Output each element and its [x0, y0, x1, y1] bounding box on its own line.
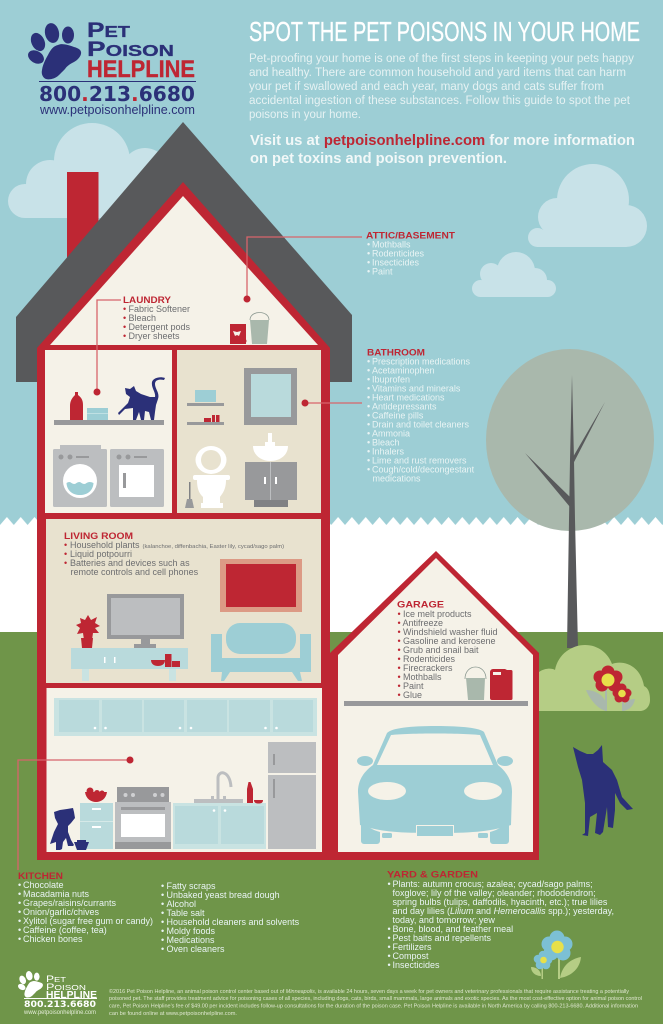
- plant: [76, 615, 100, 648]
- text: garage: •: [398, 681, 401, 691]
- text: bathroom: medications: [372, 474, 421, 484]
- callout line: attic: [244, 237, 362, 302]
- washer: [53, 445, 107, 507]
- text: laundry: Dryer sheets: [128, 331, 180, 341]
- logo: footer: [17, 970, 97, 1016]
- text: attic/basement: •: [367, 240, 370, 250]
- media console: [71, 648, 188, 681]
- text: yard and garden: •: [388, 933, 391, 943]
- text: kitchen: •: [161, 908, 164, 918]
- text: living room: [64, 531, 284, 577]
- logo: footer: P OISON: [46, 982, 86, 992]
- intro paragraph: poisons in your home.: [249, 107, 361, 121]
- footer disclaimer: [109, 988, 642, 1017]
- toilet and brush: [185, 446, 230, 508]
- text: kitchen: •: [18, 934, 21, 944]
- text: bathroom: [367, 348, 475, 484]
- text: garage: GARAGE: [397, 600, 445, 610]
- text: kitchen: •: [18, 916, 21, 926]
- text: yard and garden: spring bulbs (tulips, daffodils, hyacinth, etc.); true lilies: [392, 897, 608, 907]
- text: laundry: Fabric Softener: [128, 304, 190, 314]
- text: attic/basement: Insecticides: [372, 258, 420, 268]
- text: garage: •: [398, 645, 401, 655]
- text: living room: •: [64, 540, 67, 550]
- text: kitchen: Onion/garlic/chives: [23, 907, 100, 917]
- text: yard and garden: YARD & GARDEN: [387, 870, 478, 880]
- text: kitchen: Macadamia nuts: [23, 889, 90, 899]
- text: kitchen: Grapes/raisins/currants: [23, 898, 117, 908]
- logo: top: 800.213.6680: [39, 82, 195, 106]
- text: kitchen: Unbaked yeast bread dough: [166, 890, 280, 900]
- footer disclaimer: ©2016 Pet Poison Helpline, an animal poison control center based out of Minneapolis, is available 24 hours, seven days a week for pet owners and veterinary professionals that require assistance treating a potentially: [109, 988, 629, 995]
- text: yard and garden: •: [388, 960, 391, 970]
- drawers with fruit bowl: [80, 788, 113, 849]
- logo: top: PET: [87, 19, 130, 42]
- text: garage: Glue: [403, 690, 422, 700]
- text: yard and garden: foxglove; lily of the valley; oleander; rhododendron;: [392, 888, 596, 898]
- text: kitchen: •: [161, 881, 164, 891]
- text: living room: Household plants: [70, 540, 140, 550]
- intro paragraph: [249, 51, 635, 121]
- text: bathroom: •: [367, 446, 370, 456]
- footer disclaimer: care, Pet Poison Helpline's fee of $49.00 per incident includes follow-up consultations for the duration of the poison case. Pet Poison Helpline is available in North America by calling 800-213-6680. Additional information: [109, 1004, 638, 1010]
- logo: top: [26, 19, 196, 117]
- text: attic/basement: Paint: [372, 266, 393, 276]
- text: attic/basement: Rodenticides: [372, 248, 425, 258]
- text: bathroom: •: [367, 402, 370, 412]
- text: garage: Paint: [403, 681, 424, 691]
- visit us callout: [250, 133, 635, 167]
- kitchen room: [46, 688, 322, 852]
- text: kitchen: Oven cleaners: [166, 944, 225, 954]
- text: living room: Liquid potpourri: [70, 549, 132, 559]
- text: garage: Mothballs: [403, 672, 442, 682]
- text: kitchen: •: [18, 907, 21, 917]
- logo: footer: www.petpoisonhelpline.com: [23, 1010, 96, 1016]
- text: laundry: •: [123, 322, 126, 332]
- text: laundry: Detergent pods: [128, 322, 191, 332]
- text: yard and garden: •: [388, 924, 391, 934]
- cloud: upper right: [528, 164, 647, 247]
- text: laundry: LAUNDRY: [123, 295, 172, 306]
- bathroom shelves: [187, 390, 224, 425]
- text: living room: •: [64, 558, 67, 568]
- text: bathroom: •: [367, 392, 370, 402]
- text: kitchen: •: [161, 890, 164, 900]
- sofa: [211, 623, 311, 681]
- dryer: [110, 449, 164, 507]
- bathroom sink cabinet: [245, 433, 297, 507]
- text: kitchen: Moldy foods: [166, 926, 216, 936]
- text: kitchen: Chocolate: [23, 880, 64, 890]
- text: living room: remote controls and cell phones: [70, 567, 199, 577]
- text: bathroom: Prescription medications: [372, 356, 471, 366]
- text: garage: Gasoline and kerosene: [403, 636, 496, 646]
- living room picture: [220, 559, 302, 612]
- cloud: left behind roof: [8, 123, 168, 218]
- text: garage: •: [398, 627, 401, 637]
- text: yard and garden: •: [388, 879, 391, 889]
- text: bathroom: Inhalers: [372, 446, 405, 456]
- text: bathroom: Ibuprofen: [372, 374, 410, 384]
- icon: cat: [118, 377, 165, 420]
- text: yard and garden: [387, 870, 614, 970]
- chimney: [67, 172, 98, 282]
- text: yard and garden: Insecticides: [392, 960, 440, 970]
- text: bathroom: Lime and rust removers: [372, 456, 467, 466]
- text: yard and garden: and day lilies (Lilium and Hemerocallis spp.); yesterday,: [392, 906, 614, 916]
- text: attic/basement: •: [367, 266, 370, 276]
- text: garage: •: [398, 609, 401, 619]
- text: garage: •: [398, 636, 401, 646]
- text: bathroom: Ammonia: [372, 428, 410, 438]
- text: bathroom: Cough/cold/decongestant: [372, 464, 475, 474]
- text: attic/basement: •: [367, 258, 370, 268]
- garage: [330, 551, 539, 860]
- text: kitchen: Household cleaners and solvents: [166, 917, 300, 927]
- text: yard and garden: •: [388, 951, 391, 961]
- text: yard and garden: Fertilizers: [392, 942, 432, 952]
- text: attic/basement: •: [367, 248, 370, 258]
- text: kitchen: •: [161, 917, 164, 927]
- bush with red flowers: [539, 645, 650, 711]
- text: kitchen: •: [18, 925, 21, 935]
- car: [357, 726, 513, 844]
- text: garage: Ice melt products: [403, 609, 472, 619]
- text: kitchen: •: [161, 944, 164, 954]
- text: bathroom: Vitamins and minerals: [372, 384, 461, 394]
- text: kitchen: Medications: [166, 935, 215, 945]
- text: attic/basement: [366, 230, 455, 276]
- text: bathroom: Antidepressants: [372, 402, 437, 412]
- text: yard and garden: Plants: autumn crocus; azalea; cycad/sago palms;: [392, 879, 593, 889]
- text: bathroom: •: [367, 410, 370, 420]
- text: kitchen: Table salt: [166, 908, 205, 918]
- text: living room: (kalanchoe, diffenbachia, Easter lily, cycad/sago palm): [142, 544, 284, 550]
- text: attic/basement: Mothballs: [372, 240, 411, 250]
- text: bathroom: •: [367, 384, 370, 394]
- text: living room: •: [64, 549, 67, 559]
- text: bathroom: •: [367, 464, 370, 474]
- text: garage: •: [398, 618, 401, 628]
- laundry room: [45, 350, 172, 513]
- text: bathroom: Caffeine pills: [372, 410, 424, 420]
- garage shelf with bucket and jug: [344, 667, 528, 706]
- text: kitchen: Chicken bones: [23, 934, 83, 944]
- text: bathroom: •: [367, 456, 370, 466]
- laundry shelf with bottle, box and cat: [54, 377, 165, 425]
- text: yard and garden: •: [388, 942, 391, 952]
- text: laundry: [123, 295, 191, 341]
- logo: footer: P ET: [46, 974, 67, 984]
- text: kitchen: Fatty scraps: [166, 881, 216, 891]
- text: garage: Grub and snail bait: [403, 645, 479, 655]
- text: bathroom: BATHROOM: [367, 348, 425, 358]
- intro paragraph: and healthy. There are common household and yard items that can harm: [249, 65, 626, 79]
- text: yard and garden: today, and tomorrow; yew: [392, 915, 495, 925]
- footer disclaimer: poisoned pet. The staff provides treatment advice for poisoning cases of all species, including dogs, cats, birds, small mammals, large animals and exotic species. As the most cost-effective option for animal poison control: [109, 996, 642, 1002]
- text: yard and garden: Compost: [392, 951, 429, 961]
- text: bathroom: Bleach: [372, 438, 400, 448]
- logo: footer: HELPLINE: [46, 990, 97, 1001]
- icon: dog in yard: [573, 745, 633, 836]
- logo: footer: 800.213.6680: [24, 1000, 96, 1010]
- logo: top: www.petpoisonhelpline.com: [39, 103, 195, 117]
- cloud: small right: [472, 252, 556, 297]
- text: laundry: •: [123, 304, 126, 314]
- stove: [115, 787, 171, 849]
- text: living room: Batteries and devices such as: [70, 558, 190, 568]
- text: kitchen: Caffeine (coffee, tea): [23, 925, 107, 935]
- text: yard and garden: Pest baits and repellents: [392, 933, 492, 943]
- text: attic/basement: ATTIC/BASEMENT: [366, 230, 455, 242]
- tree: [486, 349, 654, 648]
- text: bathroom: Acetaminophen: [372, 366, 435, 376]
- text: bathroom: •: [367, 438, 370, 448]
- text: kitchen: •: [18, 898, 21, 908]
- intro paragraph: accidental ingestion of these substances. Follow this guide to spot the pet: [249, 93, 631, 107]
- text: garage: •: [398, 663, 401, 673]
- text: laundry: Bleach: [128, 313, 156, 323]
- footer disclaimer: can be found online at www.petpoisonhelpline.com.: [109, 1011, 237, 1017]
- visit us callout: on pet toxins and poison prevention.: [250, 151, 507, 167]
- text: bathroom: •: [367, 356, 370, 366]
- text: garage: Rodenticides: [403, 654, 456, 664]
- text: garage: •: [398, 690, 401, 700]
- kitchen cabinets: [54, 698, 317, 736]
- bathroom mirror: [244, 368, 297, 425]
- text: laundry: •: [123, 331, 126, 341]
- text: kitchen: Alcohol: [166, 899, 196, 909]
- text: kitchen: •: [161, 926, 164, 936]
- icon: paw: [26, 22, 81, 79]
- roof: [16, 122, 352, 382]
- text: kitchen: •: [18, 880, 21, 890]
- icon: dog and bowl: [50, 808, 89, 850]
- text: kitchen: [18, 871, 300, 954]
- living room: [46, 519, 321, 683]
- callout line: laundry: [94, 300, 121, 396]
- refrigerator: [268, 742, 316, 849]
- text: bathroom: •: [367, 374, 370, 384]
- text: garage: [397, 600, 498, 700]
- attic items: box and paint bucket: [230, 312, 269, 344]
- text: garage: Windshield washer fluid: [403, 627, 498, 637]
- sink counter: [173, 773, 266, 849]
- text: bathroom: •: [367, 428, 370, 438]
- logo: top: HELPLINE: [87, 56, 195, 83]
- text: kitchen: Xylitol (sugar free gum or candy): [23, 916, 153, 926]
- flowers in yard: [531, 930, 581, 979]
- intro paragraph: your pet if swallowed and each year, many dogs and cats suffer from: [249, 79, 604, 93]
- callout line: kitchen: [18, 756, 134, 870]
- text: bathroom: Heart medications: [372, 392, 445, 402]
- text: laundry: •: [123, 313, 126, 323]
- callout line: bathroom: [302, 400, 362, 406]
- text: bathroom: •: [367, 420, 370, 430]
- text: garage: Antifreeze: [402, 618, 443, 628]
- text: garage: •: [398, 672, 401, 682]
- text: garage: •: [398, 654, 401, 664]
- logo: top: P OISON: [87, 38, 174, 61]
- text: kitchen: •: [18, 889, 21, 899]
- intro paragraph: Pet-proofing your home is one of the first steps in keeping your pets happy: [249, 51, 635, 65]
- text: yard and garden: Bone, blood, and feather meal: [392, 924, 513, 934]
- text: kitchen: KITCHEN: [18, 871, 63, 882]
- text: bathroom: •: [367, 366, 370, 376]
- bathroom room: [177, 350, 321, 513]
- television: [107, 594, 184, 648]
- text: garage: Firecrackers: [403, 663, 453, 673]
- attic room: [50, 196, 318, 345]
- text: living room: LIVING ROOM: [64, 531, 133, 542]
- text: kitchen: •: [161, 899, 164, 909]
- text: bathroom: Drain and toilet cleaners: [372, 420, 470, 430]
- visit us callout: Visit us at petpoisonhelpline.com for more information: [250, 133, 635, 149]
- house: [37, 182, 330, 860]
- text: kitchen: •: [161, 935, 164, 945]
